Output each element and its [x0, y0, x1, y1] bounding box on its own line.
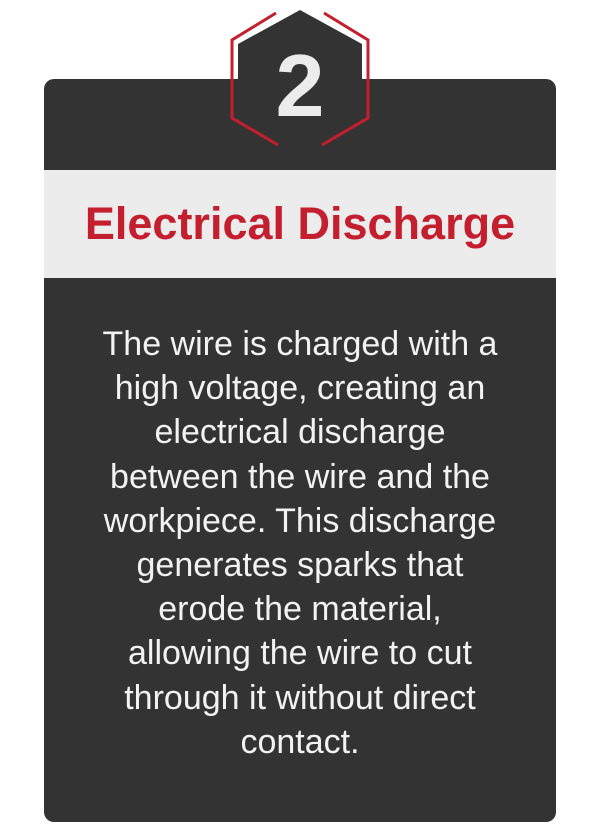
body text: generates sparks that [137, 546, 463, 584]
body text [103, 325, 498, 761]
title band [44, 170, 556, 278]
title: Electrical Discharge [85, 198, 515, 249]
icon: hexagon number badge: 2 [276, 36, 324, 135]
body text: allowing the wire to cut [128, 634, 472, 672]
body text: high voltage, creating an [115, 369, 485, 407]
body text: workpiece. This discharge [104, 502, 496, 540]
body text: erode the material, [158, 590, 442, 628]
icon: hexagon number badge [230, 10, 370, 146]
body text: electrical discharge [154, 413, 446, 451]
body text: The wire is charged with a [103, 325, 497, 363]
body text: contact. [240, 723, 360, 761]
body text: through it without direct [124, 679, 476, 717]
card background [44, 79, 556, 822]
body text: between the wire and the [110, 458, 490, 496]
